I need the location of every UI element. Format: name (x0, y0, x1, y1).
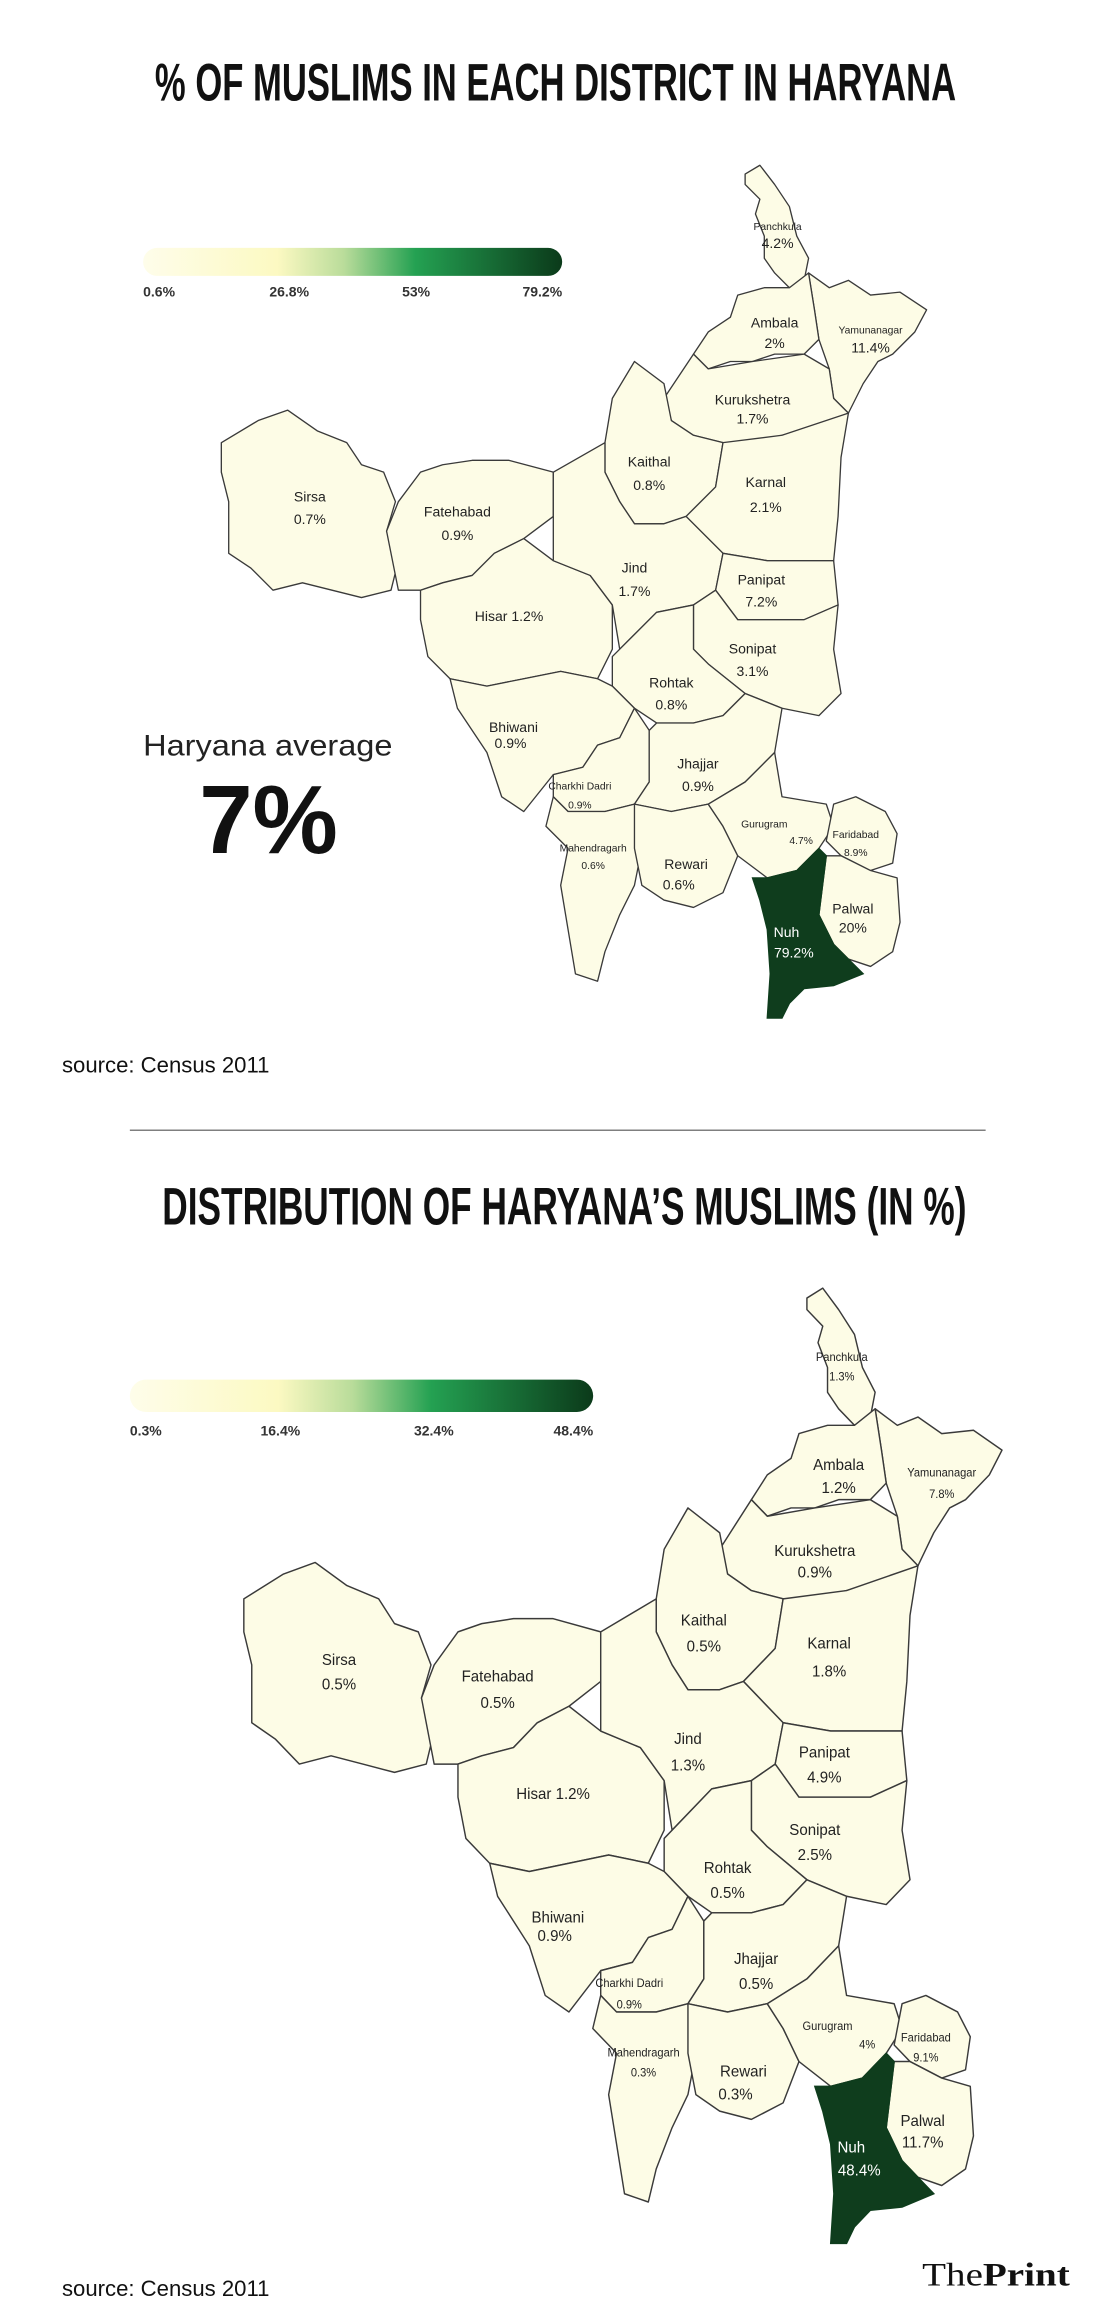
legend 1: 79.2% (522, 284, 563, 300)
map 2: Sonipat (789, 1822, 841, 1839)
legend 2: 48.4% (553, 1423, 594, 1439)
map 2: Mahendragarh (607, 2047, 680, 2060)
map 2: 0.9% (798, 1564, 832, 1581)
legend 2 (130, 1380, 594, 1439)
Haryana average callout (143, 729, 392, 874)
map 1: Kaithal (628, 453, 671, 469)
map 1: 0.9% (495, 735, 526, 751)
map 1: 0.9% (441, 527, 473, 543)
map 1: Jhajjar (677, 756, 719, 772)
Haryana average callout: Haryana average (143, 729, 392, 762)
map 1: Hisar 1.2% (475, 608, 543, 624)
map 1: Gurugram (741, 820, 788, 831)
map 2: 0.3% (718, 2086, 753, 2104)
map 2: 7.8% (929, 1489, 954, 1501)
map 1: 11.4% (851, 340, 890, 356)
map 2: 0.5% (687, 1638, 721, 1656)
Haryana average callout: 7% (199, 765, 338, 874)
map 2: Jhajjar (734, 1951, 778, 1968)
map 1: Fatehabad (424, 503, 491, 519)
map 1: Faridabad (833, 830, 879, 841)
map 2: 1.3% (829, 1372, 854, 1384)
map 2: Gurugram (803, 2021, 853, 2033)
map 1: Panchkula (753, 222, 802, 233)
map 1: 2.1% (750, 499, 782, 515)
legend 1: 53% (402, 284, 431, 300)
map 1: Rewari (664, 856, 708, 872)
map 1: Nuh (774, 924, 799, 940)
map 2: Kurukshetra (774, 1543, 856, 1560)
map 1: Charkhi Dadri (548, 781, 611, 792)
map 2: 0.5% (710, 1885, 745, 1902)
map 2: 0.9% (538, 1928, 572, 1945)
map 2: Rewari (720, 2063, 767, 2080)
map 1: 79.2% (774, 945, 814, 961)
map 1: 0.7% (294, 511, 326, 527)
map 2: Panipat (799, 1744, 851, 1762)
map 2: Yamunanagar (907, 1467, 976, 1480)
map 2: Hisar 1.2% (516, 1786, 590, 1803)
map 1: Bhiwani (489, 719, 538, 735)
map 1: 2% (765, 335, 785, 351)
map 2: Jind (674, 1731, 702, 1748)
map 2: 4% (859, 2039, 875, 2051)
source 2: source: Census 2011 (62, 2276, 269, 2301)
map 1: 0.9% (682, 778, 714, 794)
legend 2: 32.4% (414, 1423, 454, 1439)
legend 1: 26.8% (269, 284, 310, 300)
legend 2: 16.4% (260, 1423, 301, 1439)
map 2: 11.7% (902, 2134, 944, 2152)
map 2: 48.4% (838, 2162, 881, 2180)
map 2: Charkhi Dadri (595, 1978, 663, 1990)
map 1: 1.7% (619, 583, 650, 599)
map 1: 8.9% (844, 848, 868, 859)
map 1: Yamunanagar (839, 325, 903, 336)
map 1: 7.2% (745, 593, 777, 609)
map 2: 1.2% (821, 1480, 856, 1497)
map 2: Sirsa (322, 1652, 357, 1669)
map 2: Palwal (901, 2113, 945, 2130)
map 1: Ambala (751, 315, 799, 331)
map 2: Faridabad (901, 2033, 951, 2045)
map 1: Kurukshetra (715, 391, 790, 407)
map 1: 3.1% (737, 663, 768, 679)
map 2: 1.8% (812, 1663, 847, 1681)
map 2: 1.3% (671, 1757, 705, 1775)
map 2: Rohtak (704, 1860, 752, 1877)
legend 1 (143, 248, 563, 300)
map 1: 4.2% (762, 235, 794, 251)
map 2: 2.5% (798, 1847, 832, 1864)
map 1: 0.8% (655, 697, 687, 713)
map 1: 1.7% (737, 410, 768, 426)
map 2: 0.5% (480, 1695, 515, 1712)
map 1: Rohtak (649, 675, 695, 691)
map 2: Bhiwani (532, 1909, 584, 1927)
map 1: Palwal (832, 900, 873, 916)
map 1: Jind (622, 559, 647, 575)
map 1: Mahendragarh (560, 843, 627, 854)
map 2: Ambala (813, 1457, 865, 1474)
map 2: Nuh (838, 2139, 865, 2157)
map 1: 20% (839, 920, 867, 936)
map 1: Panipat (738, 571, 785, 587)
map 2: 0.3% (631, 2067, 656, 2079)
map 2: 9.1% (913, 2052, 939, 2065)
map 2 (244, 1288, 1002, 2243)
logo: ThePrint: The Print (922, 2258, 1070, 2294)
legend 2: 0.3% (130, 1423, 162, 1439)
map 2: 0.5% (322, 1676, 356, 1694)
map 1: Karnal (746, 474, 786, 490)
map 1: 0.6% (663, 877, 695, 893)
map 1: Sirsa (294, 489, 326, 505)
map 2: Fatehabad (462, 1668, 534, 1686)
map 2: Kaithal (681, 1612, 727, 1629)
map 2: 0.5% (739, 1976, 774, 1993)
map 1: 4.7% (789, 836, 813, 847)
legend 1: 0.6% (143, 284, 176, 300)
map 1 (221, 165, 927, 1018)
map 2: 4.9% (807, 1769, 842, 1786)
map 1: 0.6% (581, 861, 605, 872)
map 1: Sonipat (729, 641, 776, 657)
source 1: source: Census 2011 (62, 1053, 269, 1078)
map 1: 0.9% (568, 801, 592, 812)
map 2: Karnal (807, 1635, 851, 1652)
map 2: 0.9% (617, 1999, 642, 2012)
map 1: 0.8% (633, 477, 665, 493)
map 2: Panchkula (816, 1352, 868, 1364)
